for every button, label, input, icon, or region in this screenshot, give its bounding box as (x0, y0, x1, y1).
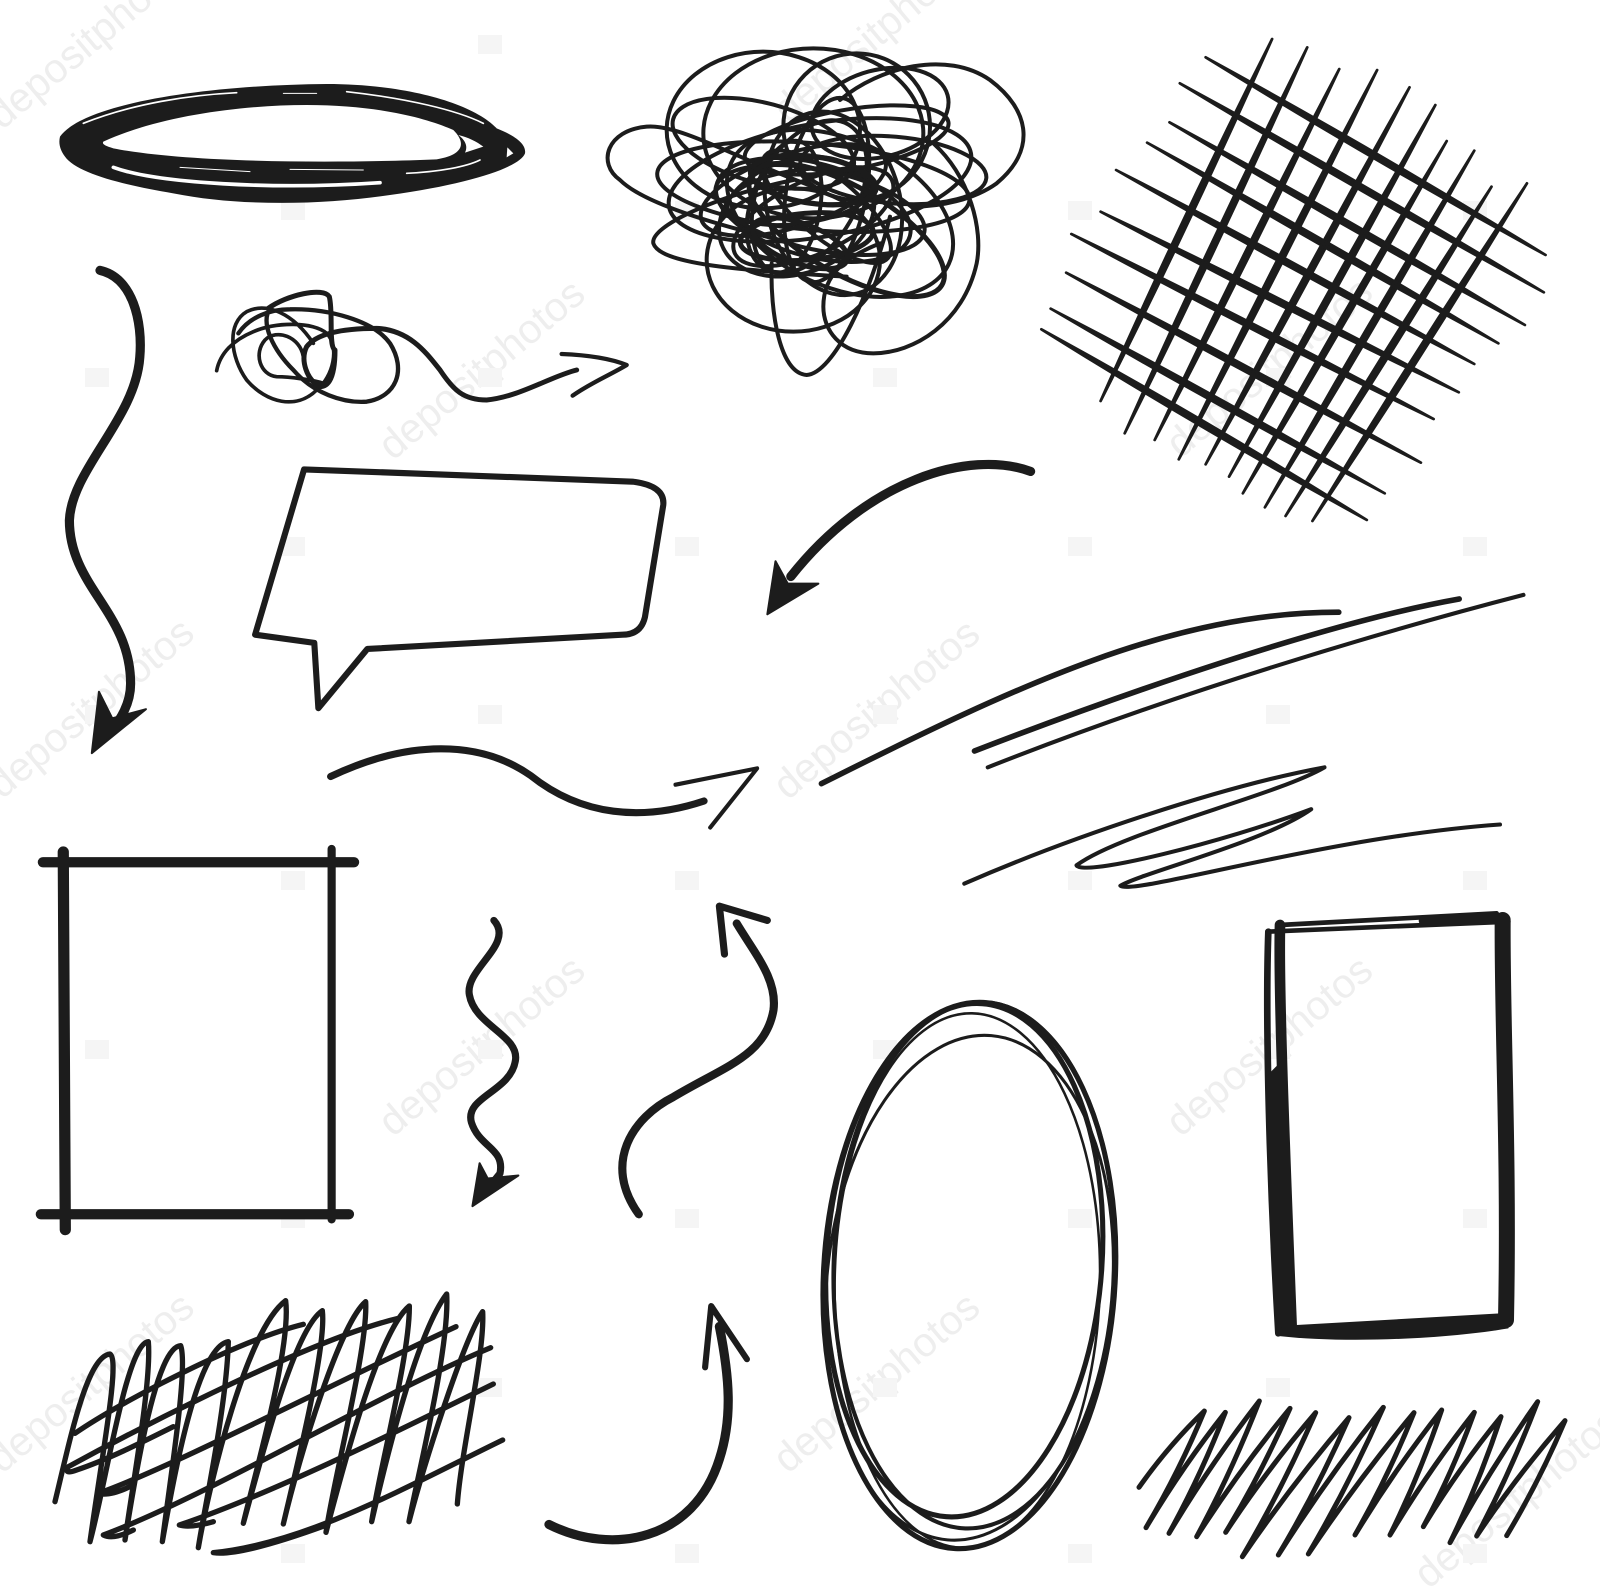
watermark text: depositphotos (1157, 946, 1381, 1145)
long diagonal strokes (821, 595, 1523, 784)
small tangle with arrow (217, 292, 627, 402)
wavy down arrow (69, 270, 146, 753)
speech bubble (255, 469, 663, 708)
curvy up arrow (622, 906, 774, 1214)
scribbled diagonal strokes (964, 767, 1500, 887)
curved up arrow bottom (549, 1306, 747, 1540)
squiggly down arrow (469, 920, 518, 1206)
hatched grid (1041, 39, 1546, 521)
watermark text: depositphotos (369, 946, 593, 1145)
tangled scribble (608, 48, 1024, 375)
curved arrow pointing down-left (767, 464, 1031, 614)
cross-hatched scribble bottom left (55, 1294, 503, 1553)
flat scribbled ellipse (59, 84, 525, 203)
watermark text: depositphotos (764, 1283, 988, 1481)
wavy arrow pointing right (331, 749, 757, 828)
zigzag hatch bottom right (1139, 1401, 1565, 1557)
square frame left (41, 849, 354, 1230)
watermark text: depositphotos (1157, 268, 1381, 466)
double rectangle frame right (1266, 913, 1513, 1340)
tall scribbled ellipse (805, 994, 1134, 1556)
watermark text: depositphotos (764, 609, 988, 808)
watermark text: depositphotos (369, 270, 593, 468)
